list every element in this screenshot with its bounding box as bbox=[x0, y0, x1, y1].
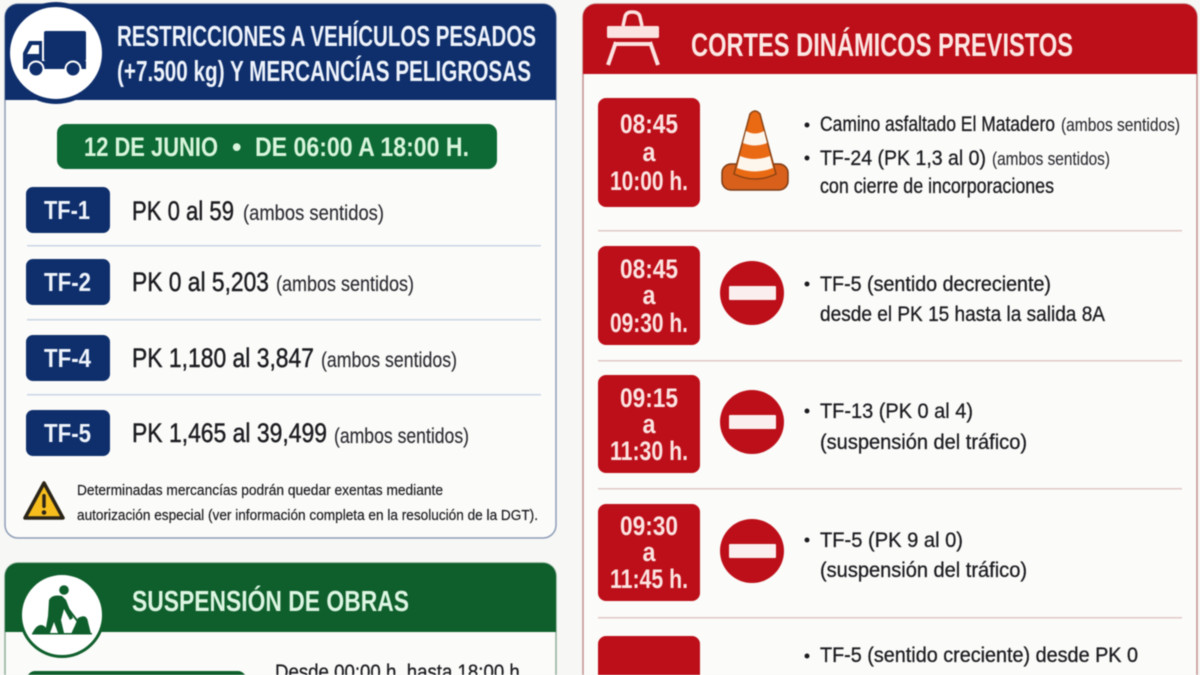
time box: 08:45 a 09:30: 08:45 bbox=[620, 254, 678, 284]
text: corte 1: (ambos sentidos) bbox=[992, 149, 1110, 169]
note: exemptions: Determinadas mercancías podrán quedar exentas mediante bbox=[77, 482, 443, 499]
row: TF-4 bbox=[26, 335, 457, 381]
row: TF-1: TF-1 bbox=[44, 195, 90, 225]
text: corte 2 bbox=[804, 273, 1105, 326]
time box: 08:45 a 09:30 bbox=[598, 246, 700, 345]
time box: cut off at page edge bbox=[598, 636, 700, 675]
time box: 09:30 a 11:45 bbox=[598, 504, 700, 601]
panel header: green band bbox=[5, 563, 556, 632]
time box: 09:15 a 11:30: a bbox=[642, 409, 656, 439]
text: corte 1: TF-24 (PK 1,3 al 0) bbox=[820, 147, 986, 170]
row: TF-4: TF-4 bbox=[44, 343, 91, 373]
heading: restricciones: RESTRICCIONES A VEHÍCULOS PESADOS bbox=[117, 19, 536, 53]
row: TF-5 bbox=[26, 410, 469, 456]
text: corte 3: (suspensión del tráfico) bbox=[820, 431, 1027, 454]
time box: 08:45 a 10:00: a bbox=[642, 137, 656, 167]
date pill bbox=[57, 124, 497, 169]
text: corte 2: desde el PK 15 hasta la salida 8A bbox=[820, 303, 1105, 326]
date pill: 12 DE JUNIO bbox=[84, 132, 218, 162]
panel header: red band bbox=[583, 4, 1197, 74]
row: TF-5: TF-5 bbox=[44, 418, 91, 448]
icon: no entry bbox=[720, 390, 784, 454]
icon: no entry bbox=[720, 519, 784, 583]
icon: road worker in circle bbox=[20, 574, 104, 656]
text: corte 4 bbox=[804, 529, 1027, 582]
row: TF-1: PK 0 al 59 bbox=[132, 196, 234, 226]
date pill: obras bbox=[27, 671, 246, 675]
panel: restricciones a vehículos pesados bbox=[5, 4, 556, 538]
text: corte 5: TF-5 (sentido creciente) desde PK 0 bbox=[820, 644, 1138, 667]
time box: 08:45 a 10:00: 08:45 bbox=[620, 109, 678, 139]
date pill: DE 06:00 A 18:00 H. bbox=[255, 132, 469, 162]
time box: 09:30 a 11:45: a bbox=[642, 537, 656, 567]
time box: 09:15 a 11:30: 09:15 bbox=[620, 383, 678, 413]
text: corte 2: TF-5 (sentido decreciente) bbox=[820, 273, 1051, 296]
heading: restricciones: (+7.500 kg) Y MERCANCÍAS PELIGROSAS bbox=[117, 54, 531, 88]
note: exemptions: autorización especial (ver información completa en la resolución de la DGT). bbox=[77, 507, 538, 524]
time box: 08:45 a 09:30: a bbox=[642, 280, 656, 310]
row: TF-1: (ambos sentidos) bbox=[243, 202, 384, 225]
heading: restricciones bbox=[117, 19, 536, 88]
row: TF-4: (ambos sentidos) bbox=[321, 349, 457, 372]
icon: warning triangle bbox=[25, 483, 63, 518]
text: corte 3 bbox=[804, 400, 1027, 454]
heading: cortes dinámicos: CORTES DINÁMICOS PREVISTOS bbox=[691, 27, 1073, 63]
panel: cortes dinámicos previstos bbox=[583, 4, 1197, 675]
row: TF-2: TF-2 bbox=[44, 267, 91, 297]
panel: suspensión de obras bbox=[5, 563, 556, 675]
time box: 09:30 a 11:45: 09:30 bbox=[620, 511, 678, 541]
icon: traffic cone bbox=[722, 111, 788, 190]
time box: 09:15 a 11:30 bbox=[598, 375, 700, 473]
row: TF-2: (ambos sentidos) bbox=[276, 273, 414, 296]
row: TF-5: PK 1,465 al 39,499 bbox=[132, 418, 327, 448]
icon: truck in circle bbox=[8, 4, 104, 102]
text: corte 1 bbox=[804, 113, 1180, 198]
icon: no entry bbox=[720, 261, 784, 325]
text: corte 1: Camino asfaltado El Matadero bbox=[820, 113, 1055, 136]
text: corte 3: TF-13 (PK 0 al 4) bbox=[820, 400, 973, 423]
icon: road barrier bbox=[607, 12, 659, 65]
row: TF-2 bbox=[26, 259, 414, 305]
time box: 09:30 a 11:45: 11:45 h. bbox=[610, 564, 688, 594]
time box: 09:15 a 11:30: 11:30 h. bbox=[610, 436, 688, 466]
row: TF-2: PK 0 al 5,203 bbox=[132, 267, 269, 297]
time box: 08:45 a 09:30: 09:30 h. bbox=[610, 308, 688, 338]
row: TF-1 bbox=[26, 187, 384, 233]
text: corte 1: con cierre de incorporaciones bbox=[820, 175, 1054, 198]
time box: 08:45 a 10:00 bbox=[598, 98, 700, 207]
text: corte 4: (suspensión del tráfico) bbox=[820, 559, 1027, 582]
row: TF-5: (ambos sentidos) bbox=[334, 425, 469, 448]
time box: 08:45 a 10:00: 10:00 h. bbox=[610, 166, 688, 196]
text: corte 1: (ambos sentidos) bbox=[1061, 115, 1180, 135]
panel header: navy band bbox=[5, 4, 556, 100]
heading: suspensión de obras: SUSPENSIÓN DE OBRAS bbox=[132, 584, 409, 618]
row: TF-4: PK 1,180 al 3,847 bbox=[132, 343, 314, 373]
date pill: • bbox=[232, 132, 241, 162]
text: corte 4: TF-5 (PK 9 al 0) bbox=[820, 529, 963, 552]
note: exemptions bbox=[77, 482, 538, 524]
